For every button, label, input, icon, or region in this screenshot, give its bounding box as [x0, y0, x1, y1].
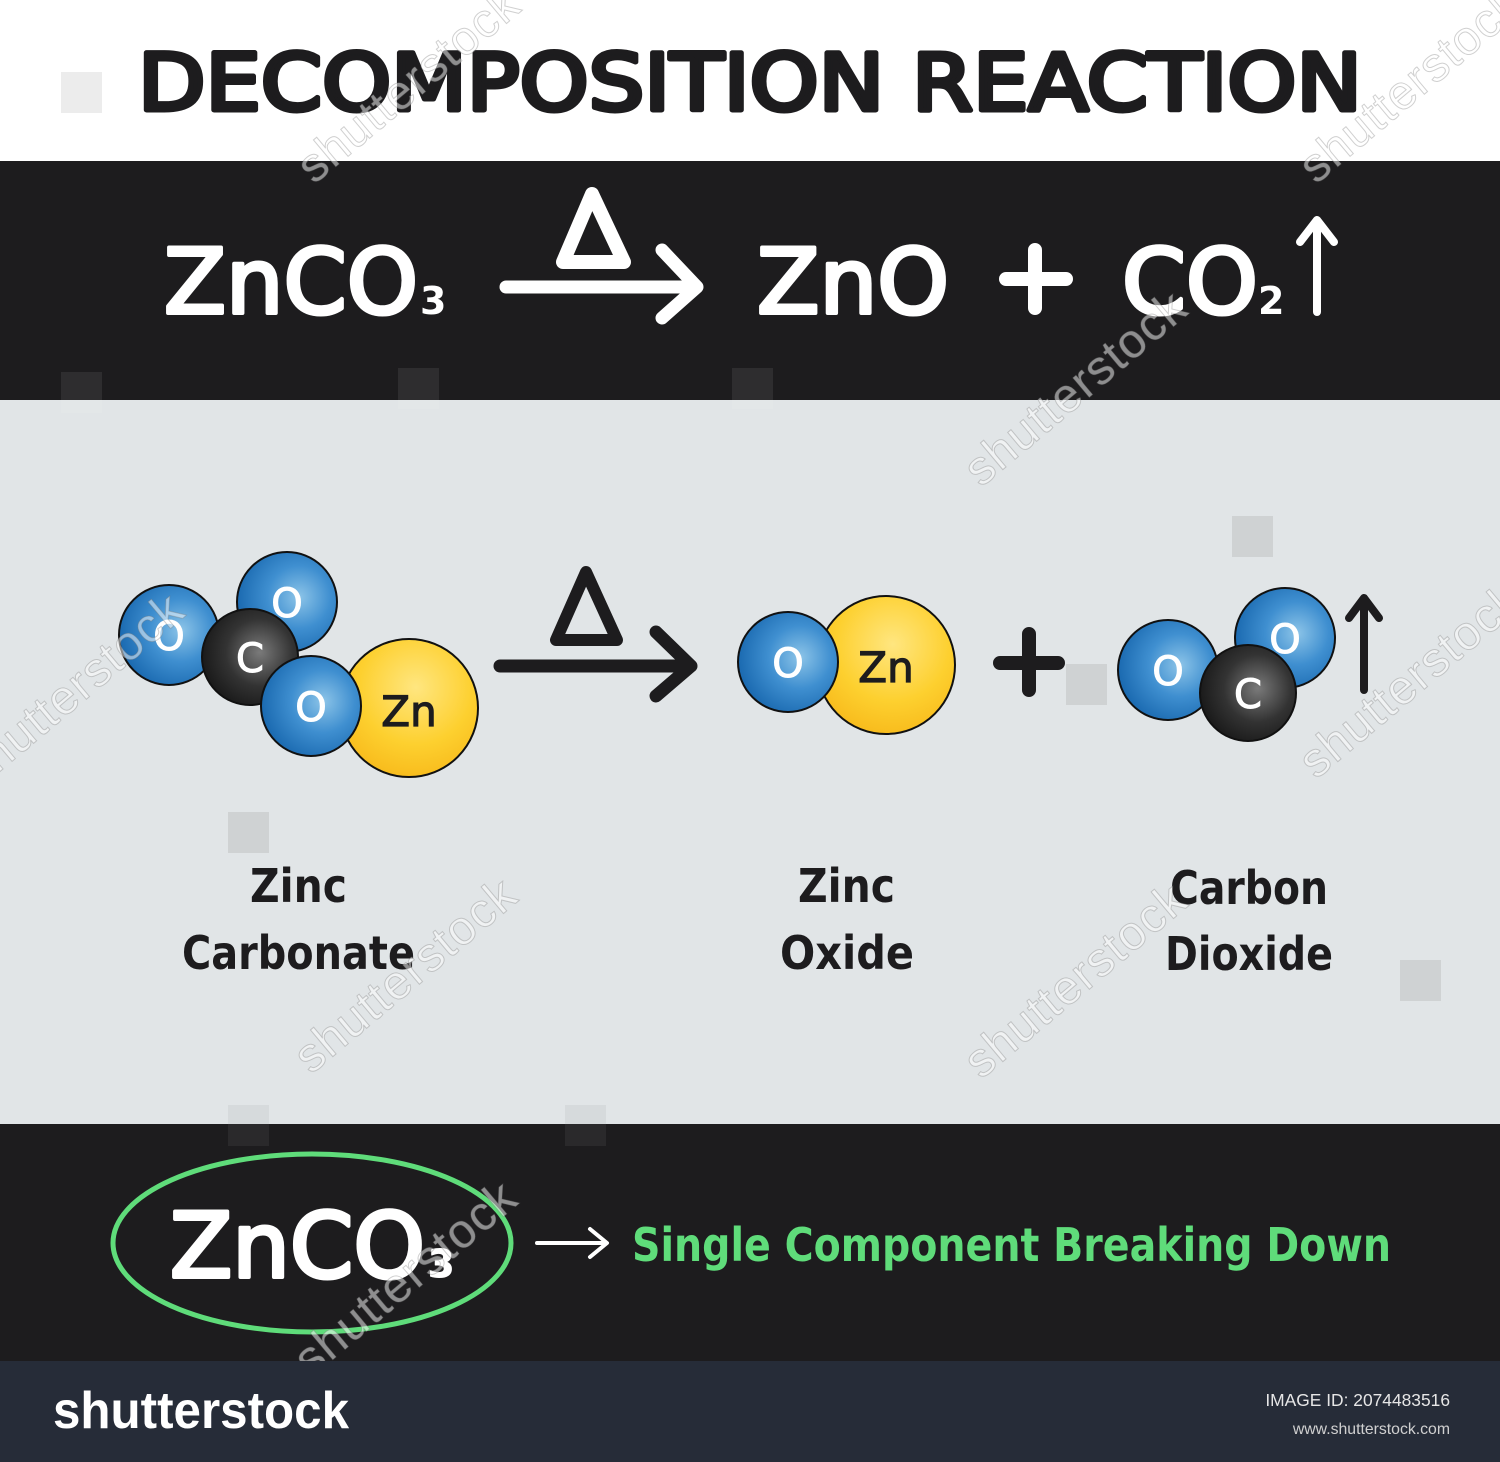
equation: subscript 2: 2: [1258, 279, 1284, 323]
atom: oxygen left: [119, 585, 219, 685]
equation: subscript 3: 3: [420, 279, 446, 323]
atom: oxygen bottom: O: [295, 685, 327, 731]
label: zinc carbonate: [182, 859, 415, 980]
footer image id: IMAGE ID: 2074483516: [1265, 1390, 1450, 1410]
label: zinc oxide: Oxide: [780, 926, 914, 980]
definition text: Single Component Breaking Down: [632, 1218, 1391, 1272]
equation: zinc oxide: ZnO: [757, 230, 949, 335]
label: zinc oxide: [780, 859, 914, 980]
label: carbon dioxide: [1165, 861, 1333, 981]
watermark: shutterstock: [954, 280, 1197, 496]
footer logo: shutterstock: [53, 1382, 349, 1440]
atom: oxygen: [738, 612, 838, 712]
atom: zinc: [340, 639, 478, 777]
atom: oxygen top: [1235, 588, 1335, 688]
atom: carbon: C: [1234, 672, 1262, 718]
equation: gas up arrow: [1300, 220, 1334, 312]
plus: [1000, 634, 1058, 690]
label: carbon dioxide: Carbon: [1170, 861, 1328, 915]
equation: carbon dioxide: CO: [1122, 230, 1258, 335]
bottom formula: 3: [428, 1242, 454, 1286]
equation: reactant: ZnCO: [164, 230, 418, 335]
equation: reaction arrow: [506, 250, 697, 318]
bottom formula: ZnCO: [170, 1194, 425, 1299]
label: zinc carbonate: Carbonate: [182, 926, 415, 980]
label: zinc carbonate: Zinc: [250, 859, 347, 913]
equation panel: [164, 194, 1334, 335]
label: carbon dioxide: Dioxide: [1165, 927, 1333, 981]
heat triangle: [556, 572, 617, 640]
atom: oxygen left: [1118, 620, 1218, 720]
molecule: carbon dioxide: [1118, 588, 1335, 741]
atom: oxygen: O: [772, 641, 804, 687]
reaction arrow: [500, 632, 691, 696]
molecule: zinc carbonate: [119, 552, 478, 777]
title: DECOMPOSITION REACTION: [138, 39, 1362, 129]
atom: oxygen top: O: [271, 581, 303, 627]
gas up arrow: [1349, 598, 1379, 690]
atom: oxygen top: [237, 552, 337, 652]
molecule: zinc oxide: [738, 596, 955, 734]
atom: oxygen left: O: [1152, 649, 1184, 695]
atom: oxygen bottom: [261, 656, 361, 756]
footer url: www.shutterstock.com: [1292, 1421, 1450, 1438]
watermark: shutterstock: [284, 1170, 527, 1386]
atom: zinc: Zn: [858, 643, 914, 692]
watermark badges: [61, 72, 1441, 1146]
footer bar: [0, 1361, 1500, 1462]
small arrow: [537, 1229, 607, 1257]
atom: oxygen left: O: [153, 614, 185, 660]
atom: zinc: [817, 596, 955, 734]
equation: plus: [1006, 250, 1066, 308]
atom: oxygen top: O: [1269, 617, 1301, 663]
watermark: shutterstock: [284, 867, 527, 1083]
equation: heat triangle: [563, 194, 624, 262]
atom: carbon: C: [236, 636, 264, 682]
atom: zinc: Zn: [381, 687, 437, 736]
highlight ellipse: [113, 1154, 511, 1332]
atom: carbon: [202, 609, 298, 705]
atom: carbon: [1200, 645, 1296, 741]
watermark: shutterstock: [954, 872, 1197, 1088]
label: zinc oxide: Zinc: [798, 859, 895, 913]
